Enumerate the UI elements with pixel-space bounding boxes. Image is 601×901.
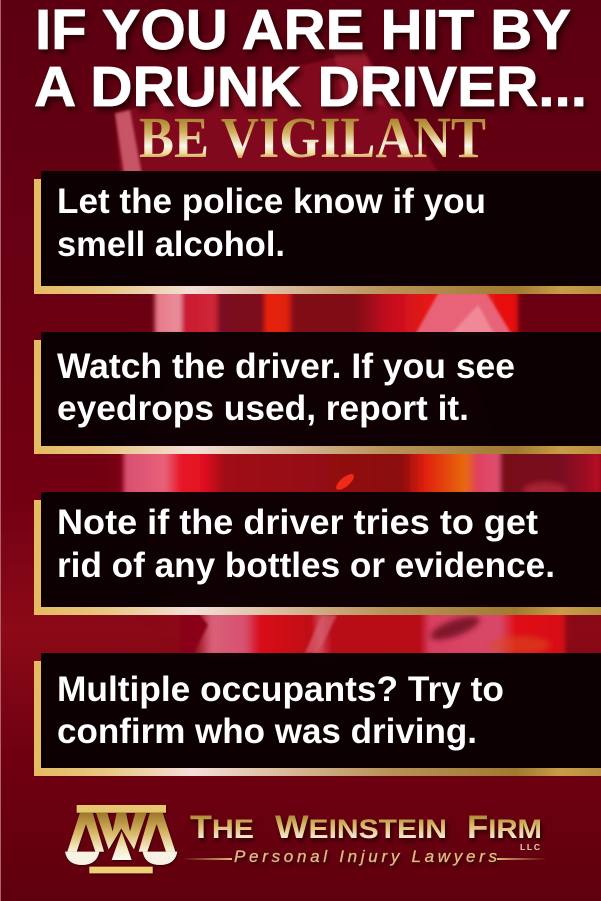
text: tip three: rid of any bottles or evidence. [57, 546, 555, 585]
text: tip three: Note if the driver tries to get [57, 503, 538, 542]
text: tip four: Multiple occupants? Try to [57, 670, 504, 709]
tagline: Personal Injury Lawyers [234, 847, 498, 866]
subtitle: be vigilant: BE VIGILANT [139, 105, 486, 170]
logo: the weinstein firm [65, 805, 547, 873]
panel: note bottles [34, 492, 601, 615]
text: tip one: Let the police know if you [57, 182, 486, 221]
panel: watch the driver [34, 332, 601, 454]
firm name: FIRM [467, 809, 542, 845]
icon: scales with W [65, 805, 177, 873]
title [34, 0, 587, 119]
title: A DRUNK DRIVER... [34, 55, 587, 119]
text: tip two: eyedrops used, report it. [57, 389, 469, 428]
panel: multiple occupants [34, 653, 601, 776]
text: tip two: Watch the driver. If you see [57, 347, 515, 386]
firm name: THE [190, 809, 254, 845]
text: tip one: smell alcohol. [57, 225, 285, 264]
text: tip four [57, 670, 504, 751]
text: tip four: confirm who was driving. [57, 712, 477, 751]
text: tip one [57, 182, 486, 264]
text: tip two [57, 347, 515, 428]
firm name [190, 809, 542, 845]
text: tip three [57, 503, 555, 585]
panel: smell alcohol [34, 171, 601, 294]
firm name: WEINSTEIN [275, 809, 447, 845]
llc mark: LLC [520, 842, 540, 852]
